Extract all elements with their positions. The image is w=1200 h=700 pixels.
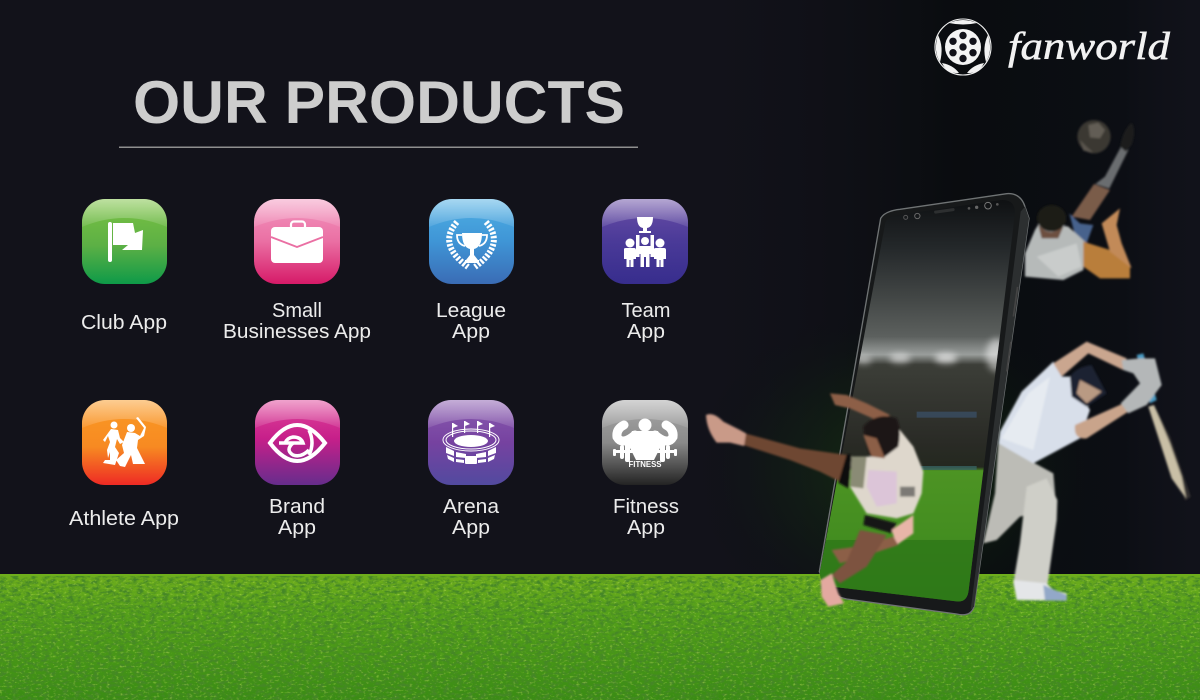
label: League [436,300,506,322]
label: App [278,517,316,539]
logo: fanworld [935,19,1171,75]
phone screen details [820,335,1000,602]
cricketer [983,342,1191,601]
label [269,496,325,539]
jersey [850,430,923,518]
label [436,300,506,343]
label: App [452,321,490,343]
label: Club App [81,312,167,334]
icon: eye [255,400,340,485]
label: App [452,517,490,539]
product: fitness app [602,400,688,539]
label [443,496,500,539]
gloves [1121,358,1162,413]
product: league app [429,199,514,343]
label: Arena [443,496,500,518]
kabaddi player [706,393,923,607]
lower arm and leg [892,515,913,545]
icon: briefcase [254,199,340,284]
icon: bodybuilder: FITNESS [628,460,662,469]
icon: stadium [428,400,514,485]
football [1077,120,1111,153]
label [613,496,679,539]
grass field [0,574,1200,700]
helmet [1070,365,1107,407]
product: team app [602,199,688,343]
label: Athlete App [69,508,179,530]
label [622,300,670,343]
logo mark [935,19,991,75]
label: Fitness [613,496,679,518]
shorts [863,515,897,533]
logo wordmark: fanworld [1008,25,1171,68]
shirt [998,362,1090,463]
head [863,416,900,457]
title: OUR PRODUCTS [133,69,625,136]
product: small businesses app [223,199,371,343]
arms [1053,342,1127,377]
icon: trophy with laurel [429,199,514,284]
product: arena app [428,400,514,539]
raised arm [830,393,890,422]
footballer [1025,120,1134,280]
legs [983,443,1057,543]
icon: flag [82,199,167,284]
phone [817,194,1029,615]
label: Small [272,300,322,322]
product: club app [81,199,167,334]
label: App [627,321,665,343]
product: brand app [255,400,340,539]
icon: team lifting trophy [602,199,688,284]
label: App [627,517,665,539]
label: Businesses App [223,321,371,343]
label: Team [622,300,670,322]
label: Brand [269,496,325,518]
bat [1137,353,1191,501]
extended leg [743,433,847,483]
sports scene [706,120,1191,615]
product: athlete app [69,400,179,530]
icon: runner and batter [82,400,167,485]
label [223,300,371,343]
